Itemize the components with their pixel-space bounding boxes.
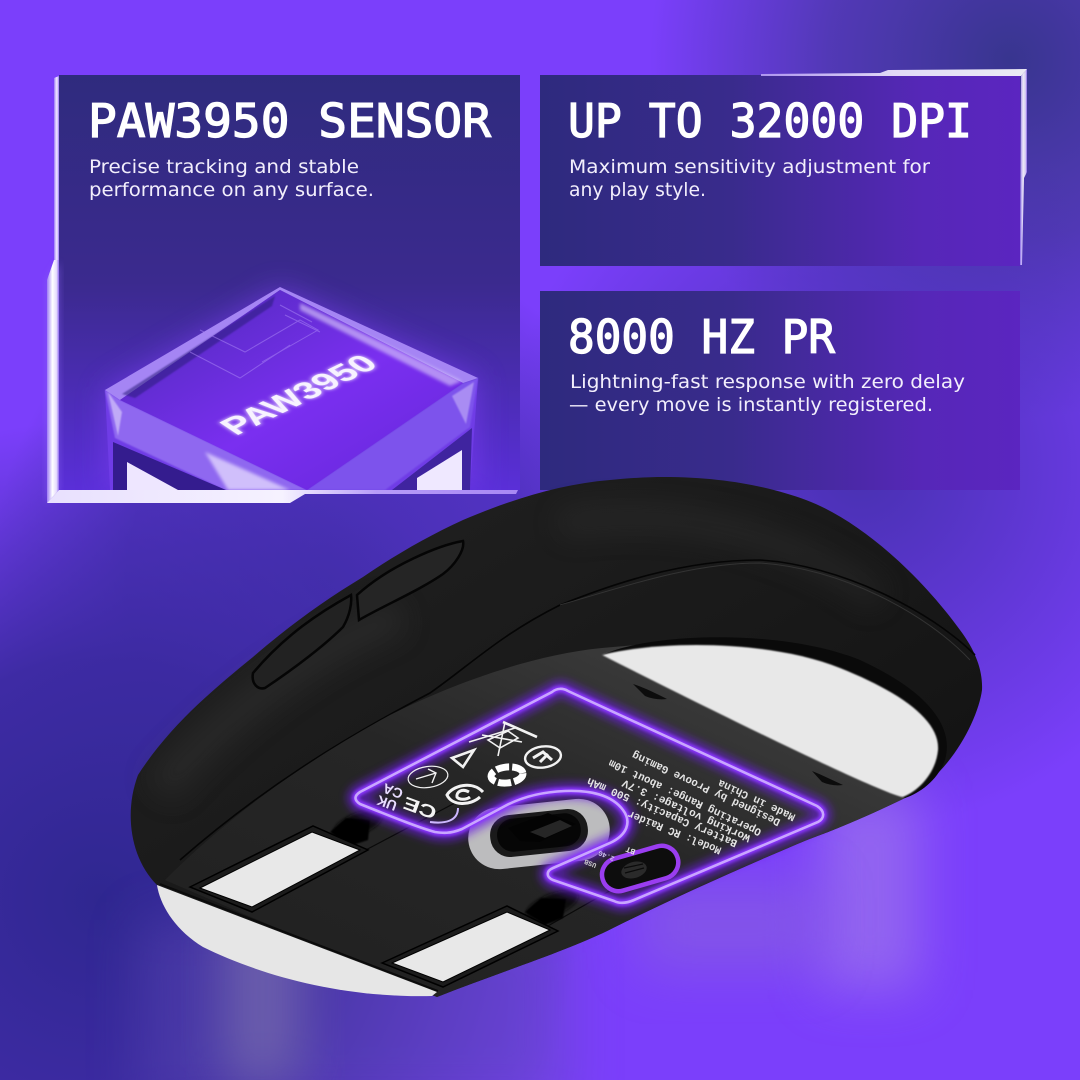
body text: DPI: Maximum sensitivity adjustment for [569,156,930,178]
body text: DPI [569,156,930,201]
switch labels: USB [583,856,598,869]
light streaks under mouse [140,790,920,1080]
side button front [357,541,463,620]
body text: polling rate: Lightning-fast response with zero delay [570,371,965,393]
neon outline: label area [356,689,823,903]
left foot skate [190,804,386,912]
spec text: Designed by Proove Gaming [631,748,783,827]
panel: 8000 Hz PR [540,291,1020,490]
side seam lines [180,560,975,860]
frame: bevel top-right [761,69,1027,265]
right foot skate [382,884,582,987]
spec text: Working voltage: 3.7V [620,776,753,843]
mouse underside illustration [131,477,982,997]
text mark: UK CA [375,780,405,814]
spec text [586,748,798,855]
body text: sensor [89,156,374,201]
text mark: UK CA: UK [375,792,399,814]
spec text: Battery Capacity: 500 mAh [586,774,740,848]
body text: sensor: performance on any surface. [89,179,374,201]
icon: circle arrow [407,764,449,790]
chip label: PAW3950 [212,350,386,440]
switch labels [583,844,637,869]
side windows [113,442,226,490]
mouse body [131,477,982,997]
panel: up to 32000 DPI [540,75,1020,266]
switch labels: BT [625,844,637,856]
body text: polling rate [569,371,965,416]
rear skate [602,645,938,797]
body text: polling rate: — every move is instantly registered. [569,394,933,416]
text mark: CE: CE [401,793,439,823]
front skate [157,885,437,996]
heading: 8000 HZ PR: 8000 HZ PR [568,310,835,364]
switch [598,842,682,895]
rear skate shadow band [602,637,947,798]
text mark: UK CA: CA [381,780,405,802]
sensor window [465,796,613,872]
bottom plate [165,643,939,997]
icon: triangle warning [452,750,474,767]
plate dividing lines [360,795,620,985]
glass side bands [105,390,307,490]
side button rear [253,595,351,688]
spec text: Model: RC Raider [626,807,723,855]
compliance icons [407,722,562,823]
panel: PAW3950 sensor [59,75,520,490]
heading: UP TO 32000 DPI: UP TO 32000 DPI [568,94,972,148]
heading: PAW3950 SENSOR: PAW3950 SENSOR [88,94,491,148]
mouse top highlights [560,518,880,600]
spec text: Operating Range: about 10m [607,756,764,837]
icon: badge [524,744,562,770]
body text: DPI: any play style. [569,179,706,201]
icon: recycling [490,765,524,785]
chip top plate [105,287,478,400]
icon: PAW3950 sensor chip [105,287,478,490]
circuit traces on chip [190,305,320,378]
frame: bevel bottom-left [47,76,518,503]
icon: crossed-out bin [469,722,537,756]
body text: sensor: Precise tracking and stable [89,156,359,178]
switch labels: 2.4G [598,848,616,862]
text mark: RCM curve [430,808,458,823]
icon: concentric marks [447,785,483,804]
spec text: Made in China [716,776,798,822]
